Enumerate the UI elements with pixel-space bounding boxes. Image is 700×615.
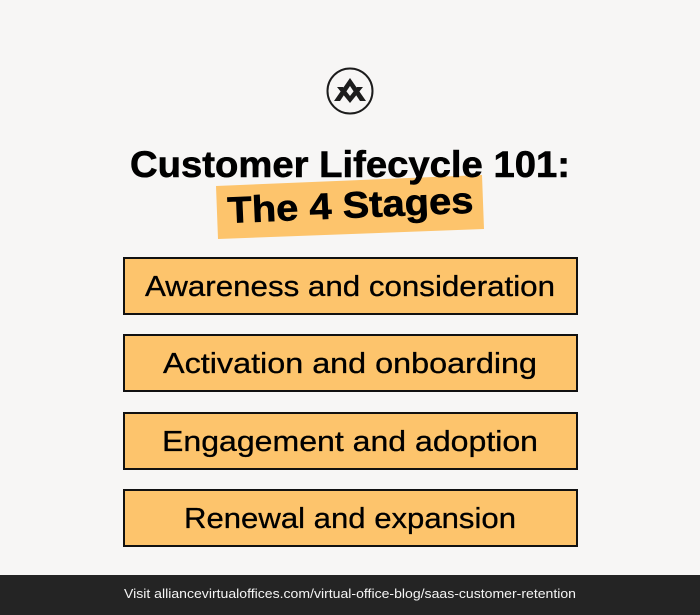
stage 4: Renewal and expansion <box>184 503 516 535</box>
stage 3 <box>124 413 577 469</box>
stage 1 <box>124 258 577 314</box>
title: Customer Lifecycle 101: <box>130 144 570 185</box>
stage 4 <box>124 490 577 546</box>
icon: logo <box>328 68 372 114</box>
stage 1: Awareness and consideration <box>145 271 555 303</box>
stage 3: Engagement and adoption <box>162 426 538 458</box>
stage 2 <box>124 335 577 391</box>
stage 2: Activation and onboarding <box>163 348 537 380</box>
footer bar <box>0 575 700 615</box>
highlighted subtitle <box>216 175 484 239</box>
highlighted subtitle: The 4 Stages <box>227 180 474 231</box>
footer bar: Visit alliancevirtualoffices.com/virtual-office-blog/saas-customer-retention <box>124 587 576 601</box>
